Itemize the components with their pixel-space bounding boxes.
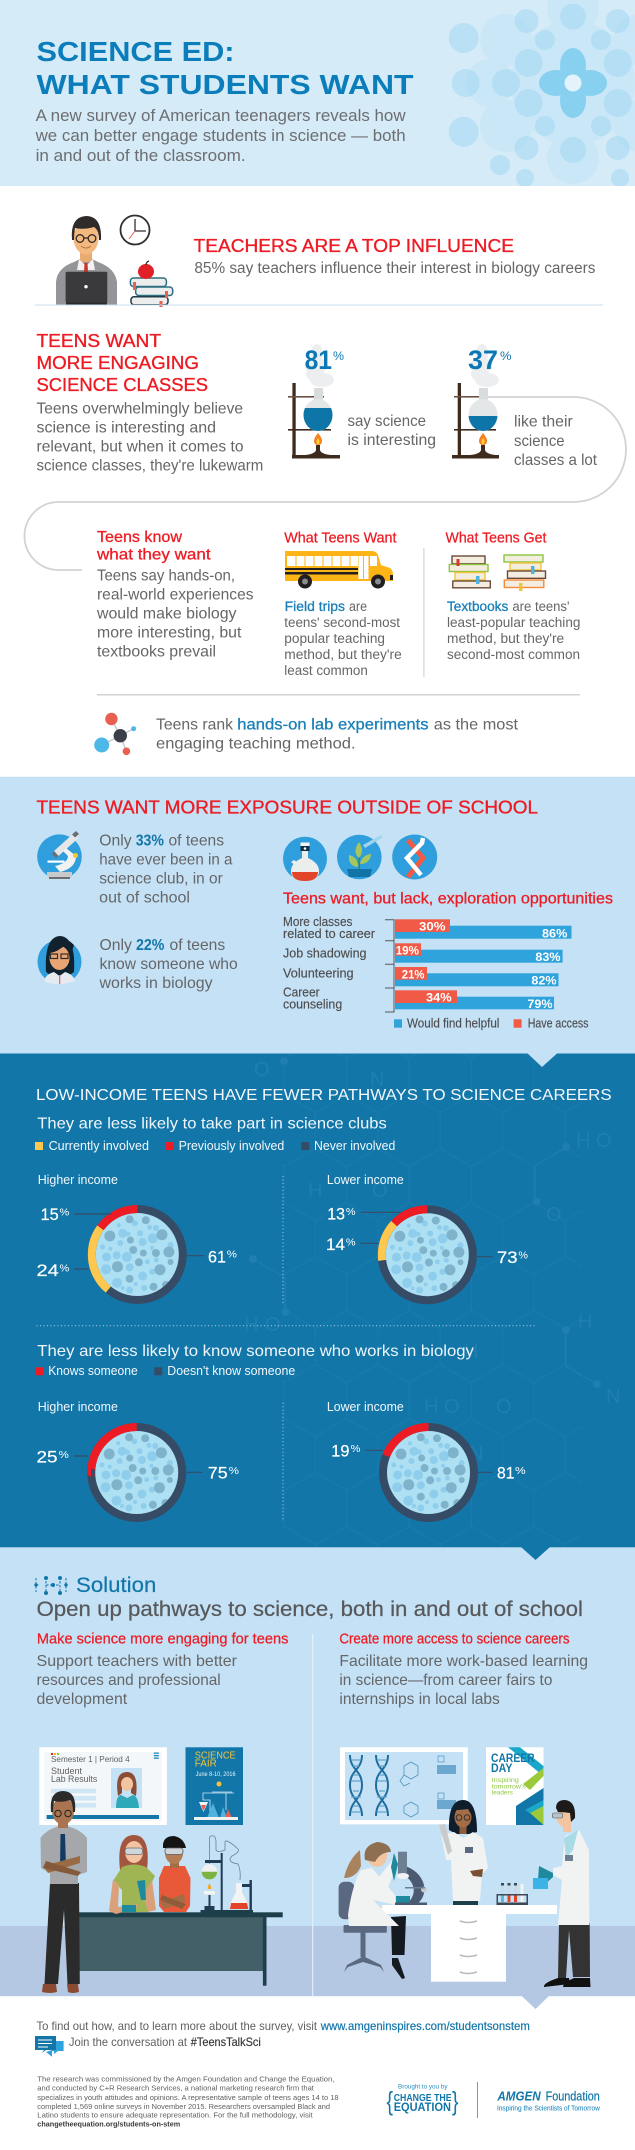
- row: career counseling: 34%: [426, 991, 452, 1005]
- text: support teachers: development: [36, 1691, 128, 1708]
- chart: clubs lower income: 13: [327, 1204, 345, 1223]
- heading: Teens know: [97, 529, 182, 546]
- body text: [96, 567, 254, 660]
- text: join the conversation: Join the conversation at: [69, 2035, 188, 2049]
- panel: teens want more engaging science classes: [36, 331, 598, 474]
- background chemistry marks: N: [370, 1069, 384, 1091]
- text: methodology: specializes in youth attitudes and opinions. A representative sample of teens ages 14 to 18: [37, 2093, 339, 2102]
- legend: Have access: [528, 1016, 588, 1030]
- arrow: into solution section: [521, 1547, 550, 1560]
- heading: MORE ENGAGING: [36, 353, 199, 373]
- text: methodology: The research was commissioned by the Amgen Foundation and Change the Equation,: [37, 2075, 335, 2084]
- text: field trips: least common: [284, 663, 368, 678]
- text: textbooks: least-popular teaching: [447, 615, 580, 630]
- text: Teens rank: [156, 717, 234, 734]
- row: volunteering: 82%: [531, 974, 557, 988]
- heading: what they want: [96, 546, 211, 563]
- background chemistry marks: H: [578, 1311, 592, 1333]
- background chemistry marks: N: [469, 1443, 483, 1465]
- row: job shadowing: [283, 943, 563, 964]
- poster: science fair: SCIENCE: [195, 1751, 236, 1762]
- text: 33 percent: Only: [99, 833, 132, 850]
- legend: science clubs: [35, 1138, 395, 1153]
- icon: books and apple: [130, 261, 173, 307]
- stat: 81 percent: 81: [305, 345, 332, 375]
- background chemistry marks: N: [606, 1386, 620, 1408]
- heading: teachers are a top influence: TEACHERS ARE A TOP INFLUENCE: [194, 236, 514, 256]
- heading: TEENS WANT: [36, 331, 161, 351]
- poster: student lab results: Student: [51, 1766, 82, 1776]
- illustration: lab table: [382, 1905, 557, 1982]
- text: support teachers: resources and professional: [36, 1672, 221, 1689]
- icon: solution pathway: [35, 1576, 67, 1594]
- title: SCIENCE ED:: [36, 36, 234, 67]
- text: 22 percent: [99, 937, 238, 992]
- text: methodology: and conducted by C+R Research Services, a national marketing research firm that: [37, 2084, 314, 2093]
- heading: SCIENCE CLASSES: [36, 375, 208, 395]
- text: facilitate work-based learning: [339, 1653, 588, 1708]
- text: field trips: are: [349, 599, 367, 614]
- text: 85 percent: 85% say teachers influence their interest in biology careers: [194, 260, 596, 277]
- poster: student lab results: Lab Results: [51, 1774, 98, 1784]
- illustration: test tube rack: [496, 1883, 528, 1905]
- stat: 37 percent: 37: [468, 345, 498, 375]
- background chemistry marks: O: [372, 1180, 388, 1202]
- illustration: microscope: [395, 1852, 427, 1905]
- text: join the conversation: [69, 2035, 261, 2049]
- text: 22 percent: works in biology: [99, 975, 213, 992]
- logo: amgen foundation: Inspiring the Scientists of Tomorrow: [497, 2106, 601, 2113]
- panel: header: [0, 0, 635, 187]
- legend: science clubs: Never involved: [314, 1138, 395, 1153]
- row: more classes related to career: More classes: [283, 915, 352, 929]
- chart: clubs lower income: 73: [497, 1248, 518, 1267]
- legend: know someone: Doesn't know someone: [167, 1363, 295, 1378]
- text: facilitate work-based learning: Facilitate more work-based learning: [339, 1653, 588, 1670]
- icon: flask: [283, 837, 327, 881]
- body text: real-world experiences: [97, 586, 254, 603]
- stat: 37 percent: [468, 345, 512, 375]
- logo: amgen foundation: AMGEN: [496, 2089, 542, 2103]
- panel: teens want more exposure: [0, 777, 635, 1054]
- row: job shadowing: 19%: [396, 943, 419, 957]
- subheading: teens want but lack: Teens want, but lack, exploration opportunities: [283, 890, 613, 907]
- callout: hands-on lab experiments: [94, 713, 519, 755]
- logo: change the equation: EQUATION: [394, 2100, 451, 2114]
- row: more classes related to career: related to career: [283, 927, 375, 941]
- text: methodology: [37, 2075, 339, 2129]
- body text: [36, 400, 263, 474]
- body text: textbooks prevail: [97, 643, 216, 660]
- subheading: open up pathways: Open up pathways to science, both in and out of school: [36, 1597, 583, 1621]
- background chemistry marks: H: [308, 1180, 322, 1202]
- logo: change the equation: }: [452, 2086, 459, 2116]
- text: say science is interesting: say science: [348, 413, 426, 430]
- column heading: create more access: Create more access to science careers: [339, 1632, 570, 1648]
- arrow: into low-income section: [528, 1054, 557, 1067]
- label: higher income: Higher income: [38, 1399, 118, 1414]
- text: textbooks: Textbooks: [447, 599, 509, 614]
- bar chart: exploration opportunities: [283, 915, 588, 1030]
- row: more classes related to career: 86%: [542, 926, 568, 940]
- panel: engaging classes connector curve: [24, 397, 626, 570]
- intro text: A new survey of American teenagers reveals how: [36, 107, 406, 125]
- text: say science is interesting: [348, 413, 436, 449]
- label: lower income: Lower income: [327, 1172, 404, 1187]
- background chemistry marks: H: [464, 1341, 478, 1363]
- text: [156, 717, 519, 753]
- chart: biology lower income: 81: [497, 1463, 514, 1482]
- background chemistry marks: H: [424, 1396, 438, 1418]
- icon: microscope: [37, 831, 82, 879]
- legend: science clubs: Previously involved: [179, 1138, 284, 1153]
- row: volunteering: [283, 966, 558, 988]
- body text: relevant, but when it comes to: [36, 438, 244, 455]
- text: textbooks: method, but they're: [447, 631, 564, 646]
- stat: 81 percent: %: [333, 349, 344, 363]
- text: methodology: Latino students to ensure adequate representation. For the full methodology, visit: [37, 2111, 313, 2120]
- text: engaging teaching method.: [156, 736, 356, 753]
- panel: teens know what they want: [94, 529, 580, 755]
- background chemistry marks: [244, 1057, 620, 1465]
- text: textbooks: are teens': [512, 599, 570, 614]
- text: as the most: [434, 717, 519, 734]
- poster: science fair: [186, 1747, 243, 1825]
- illustration: seated scientist: [339, 1842, 406, 1979]
- column: what teens want: [284, 531, 402, 678]
- logo: change the equation: {: [386, 2086, 393, 2116]
- chart: clubs lower income: %: [518, 1250, 528, 1262]
- background chemistry marks: O: [265, 1314, 281, 1336]
- column heading: make science more engaging: Make science more engaging for teens: [37, 1632, 288, 1648]
- background chemistry marks: O: [546, 1204, 562, 1226]
- column: what teens get: [446, 531, 580, 662]
- background chemistry marks: H: [244, 1314, 258, 1336]
- heading: LOW-INCOME TEENS HAVE FEWER PATHWAYS TO SCIENCE CAREERS: [36, 1087, 612, 1104]
- row: career counseling: 79%: [527, 997, 553, 1011]
- icon: flask 37 percent: [452, 344, 499, 458]
- chart: biology lower income: %: [515, 1466, 526, 1477]
- poster: science fair: June 8-10, 2016: [196, 1772, 236, 1778]
- heading: TEENS WANT MORE EXPOSURE OUTSIDE OF SCHOOL: [36, 798, 538, 818]
- chart: biology higher income: 25: [36, 1448, 58, 1467]
- poster: career day: DAY: [491, 1763, 513, 1775]
- chart: clubs higher income: %: [60, 1264, 69, 1274]
- chart: clubs higher income: [36, 1205, 237, 1300]
- text: like their science classes a lot: classes a lot: [514, 452, 598, 469]
- illustration: teacher: [40, 1791, 87, 1993]
- text: facilitate work-based learning: internships in local labs: [339, 1691, 500, 1708]
- legend: know someone: [36, 1363, 295, 1378]
- panel: teachers influence: [35, 216, 603, 307]
- legend: [394, 1016, 588, 1030]
- chart: biology higher income: %: [59, 1450, 69, 1461]
- text: support teachers: [36, 1653, 238, 1708]
- chart: clubs lower income: %: [346, 1238, 356, 1248]
- poster: career day: Inspiring: [492, 1778, 519, 1784]
- text: 33 percent: have ever been in a: [99, 852, 233, 869]
- heading: solution: Solution: [76, 1574, 156, 1597]
- text: field trips: [284, 599, 402, 678]
- body text: would make biology: [96, 605, 236, 622]
- illustration: girl student: [109, 1835, 156, 1914]
- row: career counseling: counseling: [283, 998, 342, 1012]
- arrow: out of solution section: [522, 1996, 549, 2009]
- text: textbooks: [447, 599, 580, 662]
- body text: Teens say hands-on,: [97, 567, 235, 584]
- illustration: boy student: [159, 1836, 190, 1912]
- text: learn more: www.amgeninspires.com/studentsonstem: [320, 2019, 530, 2033]
- poster: science fair: FAIR: [195, 1759, 217, 1770]
- text: field trips: popular teaching: [284, 631, 385, 646]
- chart: clubs higher income: 15: [40, 1205, 59, 1224]
- background chemistry marks: O: [444, 1396, 460, 1418]
- body text: science is interesting and: [36, 419, 216, 436]
- text: 33 percent: science club, in or: [99, 871, 223, 888]
- chart: clubs higher income: %: [227, 1250, 237, 1260]
- text: 22 percent: 22%: [136, 937, 164, 954]
- intro text: we can better engage students in science — both: [35, 127, 406, 145]
- chart: clubs lower income: [326, 1204, 528, 1300]
- text: 33 percent: out of school: [99, 890, 190, 907]
- row: job shadowing: 83%: [535, 950, 561, 964]
- text: learn more: [36, 2019, 530, 2033]
- poster: career day: CAREER: [491, 1753, 535, 1765]
- poster: dna chart: [340, 1747, 468, 1824]
- icon: dna: [392, 834, 437, 880]
- background chemistry marks: H: [576, 1130, 590, 1152]
- row: volunteering: Volunteering: [283, 966, 354, 980]
- text: support teachers: Support teachers with better: [36, 1653, 238, 1670]
- chart: clubs higher income: 61: [208, 1247, 226, 1266]
- poster: career day: [486, 1747, 544, 1825]
- row: volunteering: 21%: [402, 967, 425, 981]
- text: textbooks: second-most common: [447, 647, 580, 662]
- illustration: lab desk: [65, 1912, 283, 1986]
- text: say science is interesting: is interesting: [348, 432, 436, 449]
- row: career counseling: Career: [283, 986, 320, 1000]
- logo: change the equation: Brought to you by: [398, 2083, 448, 2090]
- body text: Teens overwhelmingly believe: [36, 400, 243, 417]
- icon: flask 81 percent: [288, 344, 340, 458]
- body text: science classes, they're lukewarm: [36, 457, 263, 474]
- text: field trips: Field trips: [285, 599, 345, 614]
- text: like their science classes a lot: science: [514, 433, 565, 450]
- heading: What Teens Get: [446, 531, 546, 547]
- text: 22 percent: Only: [100, 937, 132, 954]
- icon: molecule: [94, 713, 136, 755]
- poster: career day: tomorrow's: [492, 1785, 526, 1791]
- icon: school bus: [285, 551, 393, 588]
- text: facilitate work-based learning: in science—from career fairs to: [339, 1672, 552, 1689]
- text: field trips: teens' second-most: [284, 615, 400, 630]
- stat: 37 percent: %: [500, 349, 512, 363]
- row: job shadowing: Job shadowing: [283, 946, 367, 960]
- heading: What Teens Want: [284, 531, 396, 547]
- chart: clubs lower income: 14: [326, 1235, 345, 1254]
- subheading: science clubs: They are less likely to take part in science clubs: [37, 1115, 387, 1132]
- label: higher income: Higher income: [38, 1172, 118, 1187]
- logo: amgen foundation: [496, 2089, 601, 2113]
- text: 22 percent: of teens: [170, 937, 225, 954]
- panel: low-income teens: [0, 1054, 635, 1548]
- chart: biology lower income: [331, 1427, 526, 1518]
- panel: footer: [35, 2019, 601, 2129]
- heading: [96, 529, 211, 563]
- text: 33 percent: of teens: [168, 833, 224, 850]
- text: learn more: To find out how, and to learn more about the survey, visit: [36, 2019, 318, 2033]
- chart: biology lower income: %: [351, 1444, 361, 1455]
- legend: know someone: Knows someone: [48, 1363, 138, 1378]
- illustration: chemistry apparatus: [200, 1836, 253, 1913]
- text: hands-on lab experiments: [237, 717, 428, 734]
- chart: clubs higher income: %: [60, 1208, 69, 1219]
- icon: plant: [337, 835, 382, 879]
- icon: chat bubbles: [35, 2036, 64, 2057]
- chart: clubs lower income: %: [346, 1207, 356, 1218]
- illustration: standing man scientist: [533, 1800, 590, 1987]
- subheading: know someone: They are less likely to know someone who works in biology: [37, 1343, 474, 1360]
- chart: biology lower income: 19: [331, 1442, 350, 1461]
- poster: student lab results: Semester 1 | Period 4: [51, 1755, 130, 1764]
- legend: science clubs: Currently involved: [49, 1138, 149, 1153]
- row: more classes related to career: 30%: [419, 920, 446, 934]
- icon: woman scientist: [38, 936, 82, 984]
- logo: change the equation: CHANGE THE: [394, 2092, 452, 2104]
- title: WHAT STUDENTS WANT: [36, 69, 414, 100]
- text: like their science classes a lot: like their: [514, 414, 573, 431]
- chart: biology higher income: [36, 1427, 239, 1518]
- row: career counseling: [283, 986, 554, 1012]
- icon: textbooks: [449, 555, 546, 591]
- chart: biology higher income: %: [229, 1466, 239, 1477]
- text: join the conversation: #TeensTalkSci: [191, 2035, 261, 2049]
- text: 33 percent: [99, 833, 233, 907]
- text: field trips: method, but they're: [284, 647, 402, 662]
- background chemistry marks: O: [496, 1396, 512, 1418]
- intro text: [35, 107, 406, 165]
- intro text: in and out of the classroom.: [36, 147, 246, 165]
- chart: clubs higher income: 24: [36, 1261, 59, 1280]
- background chemistry marks: O: [254, 1059, 270, 1081]
- illustration: standing woman scientist: [439, 1800, 488, 1905]
- poster: career day: leaders: [492, 1790, 513, 1796]
- text: methodology: changetheequation.org/students-on-stem: [37, 2120, 181, 2129]
- icon: teacher at laptop: [56, 216, 117, 305]
- text: like their science classes a lot: [514, 414, 598, 469]
- label: lower income: Lower income: [327, 1399, 404, 1414]
- text: 22 percent: know someone who: [100, 956, 238, 973]
- legend: Would find helpful: [407, 1016, 499, 1030]
- chart: biology higher income: 75: [208, 1463, 228, 1482]
- heading: [36, 331, 208, 395]
- poster: student lab results: [39, 1747, 167, 1825]
- text: methodology: completed 1,569 online surveys in November 2015. Researchers oversampled Black and: [37, 2102, 330, 2111]
- logo: amgen foundation: Foundation: [546, 2089, 600, 2103]
- text: 33 percent: 33%: [136, 833, 164, 850]
- background chemistry marks: O: [596, 1130, 612, 1152]
- body text: more interesting, but: [97, 624, 242, 641]
- logo: change the equation: [386, 2083, 459, 2116]
- icon: molecular flower pattern: [449, 0, 635, 187]
- icon: clock: [120, 216, 150, 244]
- panel: solution: [0, 1547, 635, 1996]
- row: more classes related to career: [283, 915, 572, 941]
- title: [36, 36, 414, 100]
